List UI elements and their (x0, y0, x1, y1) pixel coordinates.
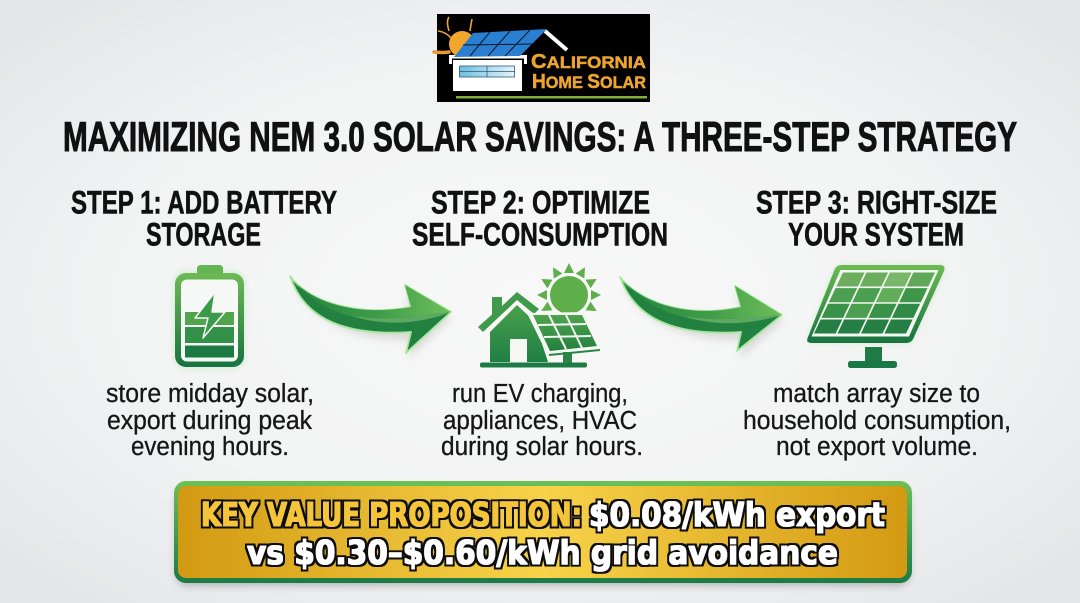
icon: house with solar panel and sun (478, 263, 601, 368)
logo wordmark (531, 51, 646, 93)
callout: key value proposition banner (174, 481, 912, 586)
step 1 heading (71, 184, 337, 252)
lightning bolt (195, 292, 225, 338)
step 2 description: during solar hours. (441, 433, 643, 461)
arrow: step 1 to step 2 (290, 276, 452, 358)
sun (537, 263, 601, 315)
icon: solar panel on stand (807, 265, 944, 368)
banner text: $0.08/kWh export (589, 495, 885, 534)
step 2 heading: STEP 2: OPTIMIZE (431, 184, 650, 220)
step 3 description: household consumption, (743, 407, 1011, 435)
logo wordmark: CALIFORNIA (531, 51, 646, 73)
logo: California Home Solar (434, 14, 650, 102)
small solar panel (527, 312, 600, 356)
step 2 heading: SELF-CONSUMPTION (412, 216, 668, 252)
banner text: KEY VALUE PROPOSITION: (201, 495, 582, 534)
icon: roof solar panels (454, 29, 547, 57)
banner text (201, 495, 885, 572)
icon: sun with rays (434, 17, 475, 57)
logo wordmark: HOME SOLAR (532, 71, 646, 93)
step 2 heading (412, 184, 668, 252)
step 1 heading: STORAGE (146, 216, 261, 252)
step 1 description (106, 380, 314, 461)
step 3 heading: YOUR SYSTEM (788, 216, 964, 252)
step 2 description: run EV charging, (452, 380, 628, 408)
icon: battery (174, 265, 245, 369)
step 1 description: store midday solar, (106, 380, 314, 408)
banner text: vs $0.30–$0.60/kWh grid avoidance (247, 533, 838, 572)
house (478, 292, 539, 332)
panel cells (814, 272, 935, 334)
step 1 description: evening hours. (131, 433, 289, 461)
step 3 heading (756, 184, 997, 252)
stand (865, 347, 882, 362)
step 3 heading: STEP 3: RIGHT-SIZE (756, 184, 997, 220)
step 3 description (743, 380, 1011, 461)
step 1 heading: STEP 1: ADD BATTERY (71, 184, 337, 220)
step 2 description: appliances, HVAC (443, 407, 637, 435)
step 1 description: export during peak (107, 407, 312, 435)
step 3 description: match array size to (773, 380, 980, 408)
step 3 description: not export volume. (776, 433, 978, 461)
step 2 description (441, 380, 643, 461)
arrow: step 2 to step 3 (620, 277, 784, 358)
icon: white house (449, 31, 567, 91)
